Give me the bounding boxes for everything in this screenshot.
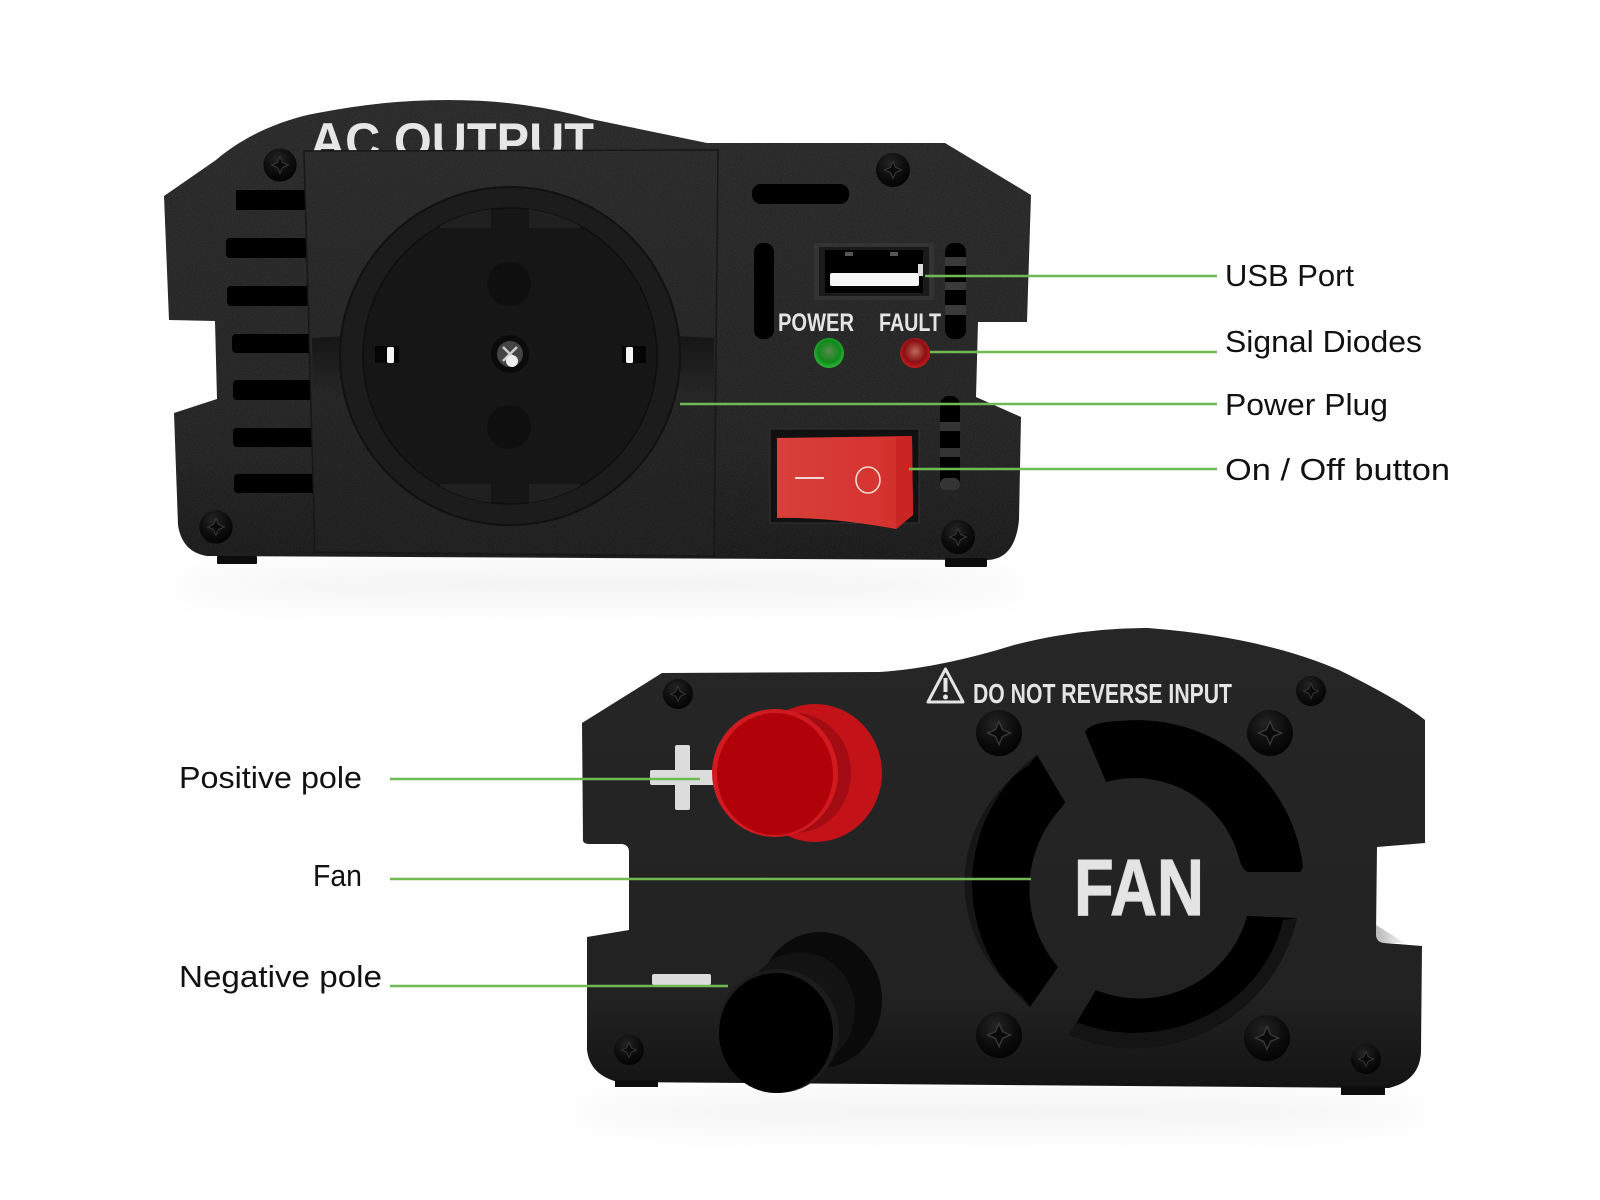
callout: Signal Diodes: Signal Diodes — [1225, 324, 1422, 359]
warning text: DO NOT REVERSE INPUT — [973, 678, 1232, 709]
side wedges of socket — [312, 336, 714, 395]
callout: Power Plug: Power Plug — [1225, 387, 1388, 422]
POWER label: POWER — [778, 309, 854, 337]
grilled vent lower — [940, 396, 960, 490]
FAN print: FAN — [1074, 843, 1204, 932]
USB port — [814, 243, 934, 300]
floor shadows — [170, 571, 1430, 1126]
negative terminal — [717, 932, 882, 1093]
warning triangle — [928, 669, 963, 702]
red LED — [900, 338, 930, 368]
top and side slots — [752, 184, 849, 339]
rear view of the inverter — [582, 628, 1425, 1095]
positive terminal — [712, 704, 882, 842]
cover plate grain — [304, 150, 718, 556]
rear screws — [614, 676, 1381, 1074]
plus sign — [650, 745, 715, 810]
callout: USB Port: USB Port — [1225, 258, 1354, 293]
front casing grain — [164, 100, 1031, 560]
left vent slots — [226, 190, 318, 493]
AC OUTPUT print: AC OUTPUT — [310, 113, 594, 169]
socket outer ring — [340, 187, 680, 525]
socket — [340, 187, 680, 525]
left opening rim shading — [965, 755, 1037, 1007]
FAULT label: FAULT — [879, 309, 941, 337]
minus sign — [652, 974, 711, 985]
green LED — [814, 338, 844, 368]
callout: On / Off button: On / Off button — [1225, 452, 1450, 487]
front body casing — [164, 100, 1031, 560]
earth holes — [487, 262, 531, 449]
centre screw — [491, 335, 529, 373]
contact pins — [375, 346, 646, 363]
notch highlight — [1376, 925, 1405, 943]
front screws — [199, 148, 975, 554]
lower right opening rim — [1069, 918, 1297, 1048]
grilled vent upper — [945, 243, 966, 339]
rear feet — [615, 1080, 1385, 1095]
rear body casing — [582, 628, 1425, 1088]
lower right opening — [1069, 916, 1297, 1048]
callout: Fan: Fan — [313, 858, 362, 893]
upper right opening — [1085, 720, 1303, 872]
callout: Positive pole: Positive pole — [179, 760, 362, 795]
callout: Negative pole: Negative pole — [179, 959, 382, 994]
socket recess — [363, 208, 657, 504]
feet — [217, 556, 987, 567]
rocker switch — [770, 429, 919, 529]
front view of the inverter — [164, 100, 1031, 567]
socket cover plate — [304, 150, 718, 556]
socket notches — [440, 206, 580, 506]
fan grille — [965, 720, 1303, 1048]
left opening — [972, 755, 1065, 1007]
